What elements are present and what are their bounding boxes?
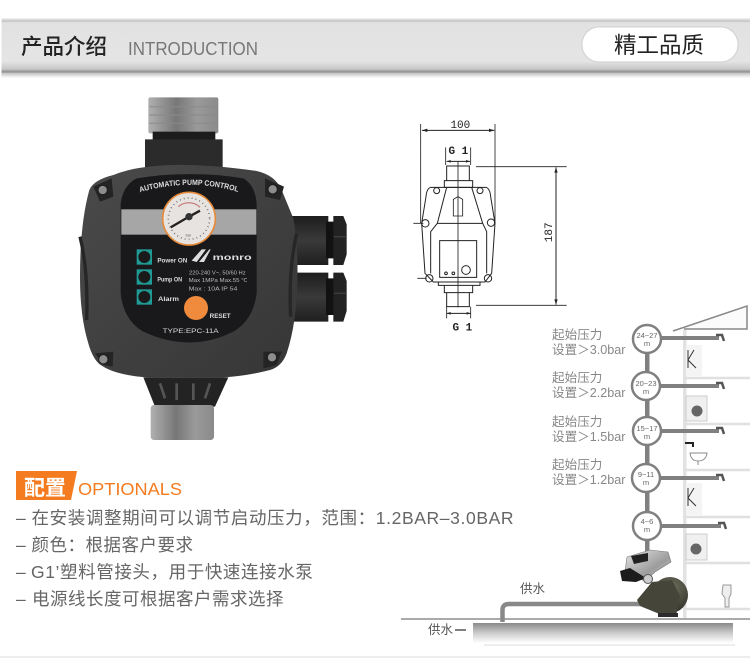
pressure label 2.2bar: 设置＞2.2bar	[552, 386, 626, 400]
height node 4-6 m	[633, 512, 661, 540]
supply pipe	[502, 604, 640, 622]
cable glands	[290, 216, 347, 322]
optionals badge	[16, 471, 77, 500]
housing	[80, 165, 297, 377]
housing side ridges	[80, 233, 297, 320]
arrow heads	[422, 129, 558, 315]
fixtures	[685, 345, 731, 607]
option item: adjustable pressure: 在安装调整期间可以调节启动压力，范围：1.2BAR–3.0BAR	[32, 508, 514, 528]
dimension height 187: 187	[544, 222, 556, 242]
height node 9-11 m: m	[643, 478, 649, 487]
pressure label 1.5bar: 起始压力	[552, 415, 602, 429]
header band	[2, 18, 750, 78]
badge: fine quality: 精工品质	[614, 33, 704, 58]
screws	[93, 178, 284, 368]
height node 9-11 m	[632, 464, 660, 492]
dimension arrows	[422, 130, 556, 313]
heading: product introduction: 产品介绍	[21, 35, 107, 59]
indicator labels: Power ON	[157, 258, 187, 264]
option item: G1 connector: G1’塑料管接头，用于快速连接水泵	[31, 562, 313, 582]
indicator labels: Pump ON	[157, 278, 182, 284]
dimension drawing	[413, 120, 567, 335]
dimension G1 bottom: G 1	[452, 323, 473, 335]
height node 20-23 m: 20~23	[635, 379, 657, 388]
pressure label 1.2bar: 起始压力	[552, 458, 602, 472]
brand logo: monro	[213, 252, 252, 262]
riser pipe	[645, 338, 650, 553]
height node 24-27 m: 24~27	[636, 331, 658, 340]
pressure label 3.0bar: 起始压力	[552, 328, 602, 342]
indicator labels: Alarm	[158, 297, 179, 303]
panel title: AUTOMATIC PUMP CONTROL	[140, 180, 238, 192]
height node 24-27 m	[633, 325, 661, 353]
specifications	[189, 270, 247, 293]
panel grey stripe	[121, 209, 256, 235]
water pump	[637, 577, 688, 617]
pump controller	[620, 550, 671, 584]
height node 20-23 m: m	[643, 387, 649, 396]
height node 15-17 m: m	[644, 432, 650, 441]
optionals heading: OPTIONALS	[78, 479, 182, 499]
specifications: 220-240 V~, 50/60 Hz	[189, 270, 246, 276]
brand logo	[192, 249, 252, 262]
option item: G1 connector: –	[16, 562, 26, 582]
pressure label 1.5bar: 设置＞1.5bar	[552, 430, 626, 444]
option item: cable length: 电源线长度可根据客户需求选择	[32, 589, 284, 609]
pressure label 3.0bar	[552, 328, 626, 357]
bottom edge strip	[0, 656, 750, 658]
device outline	[422, 166, 495, 307]
specifications: Max : 10A IP 54	[189, 287, 238, 293]
reset button	[184, 296, 208, 320]
type label: TYPE:EPC-11A	[163, 328, 219, 335]
option item: colour: –	[16, 535, 26, 555]
badge: fine quality	[582, 27, 738, 62]
control panel face	[121, 174, 257, 342]
pressure label 1.2bar	[552, 458, 626, 487]
supply label lower: 供水	[428, 623, 454, 637]
option item: colour: 颜色：根据客户要求	[32, 535, 194, 555]
top threaded connector	[145, 97, 223, 168]
product photo: automatic pump control	[78, 97, 347, 440]
option item: cable length: –	[16, 589, 26, 609]
pressure gauge: bar	[186, 234, 192, 238]
building structure	[673, 306, 750, 618]
height node 15-17 m: 15~17	[636, 424, 658, 433]
building water diagram	[552, 306, 750, 618]
height node 4-6 m: m	[644, 525, 650, 534]
indicator lights	[137, 249, 152, 305]
heading: INTRODUCTION: INTRODUCTION	[128, 38, 258, 59]
dimension G1 top: G 1	[448, 146, 469, 158]
option item: adjustable pressure: –	[16, 508, 26, 528]
pressure label 2.2bar	[552, 371, 626, 400]
reset label: RESET	[210, 313, 231, 320]
pressure label 1.2bar: 设置＞1.2bar	[552, 473, 626, 487]
pressure gauge	[163, 192, 215, 245]
supply label lower	[428, 623, 466, 637]
height node 20-23 m	[632, 372, 660, 400]
indicator labels	[157, 258, 187, 303]
pressure label 1.5bar	[552, 415, 626, 444]
height node 24-27 m: m	[644, 339, 650, 348]
ground	[401, 619, 750, 645]
pressure label 2.2bar: 起始压力	[552, 371, 602, 385]
pump installation	[401, 550, 750, 645]
specifications: Max 1MPa Max.55 ℃	[189, 277, 247, 284]
centre and extension lines	[413, 124, 567, 318]
optionals section	[16, 471, 514, 609]
height node 15-17 m	[633, 417, 661, 445]
supply label upper: 供水	[520, 582, 546, 596]
height node 9-11 m: 9~11	[638, 470, 654, 479]
dimension width 100: 100	[450, 120, 470, 132]
optionals badge: 配置	[24, 477, 66, 500]
faucets	[716, 335, 726, 529]
bottom threaded connector	[143, 377, 228, 440]
height node 4-6 m: 4~6	[641, 517, 653, 526]
branch pipes	[660, 338, 721, 526]
pressure label 3.0bar: 设置＞3.0bar	[552, 343, 626, 357]
